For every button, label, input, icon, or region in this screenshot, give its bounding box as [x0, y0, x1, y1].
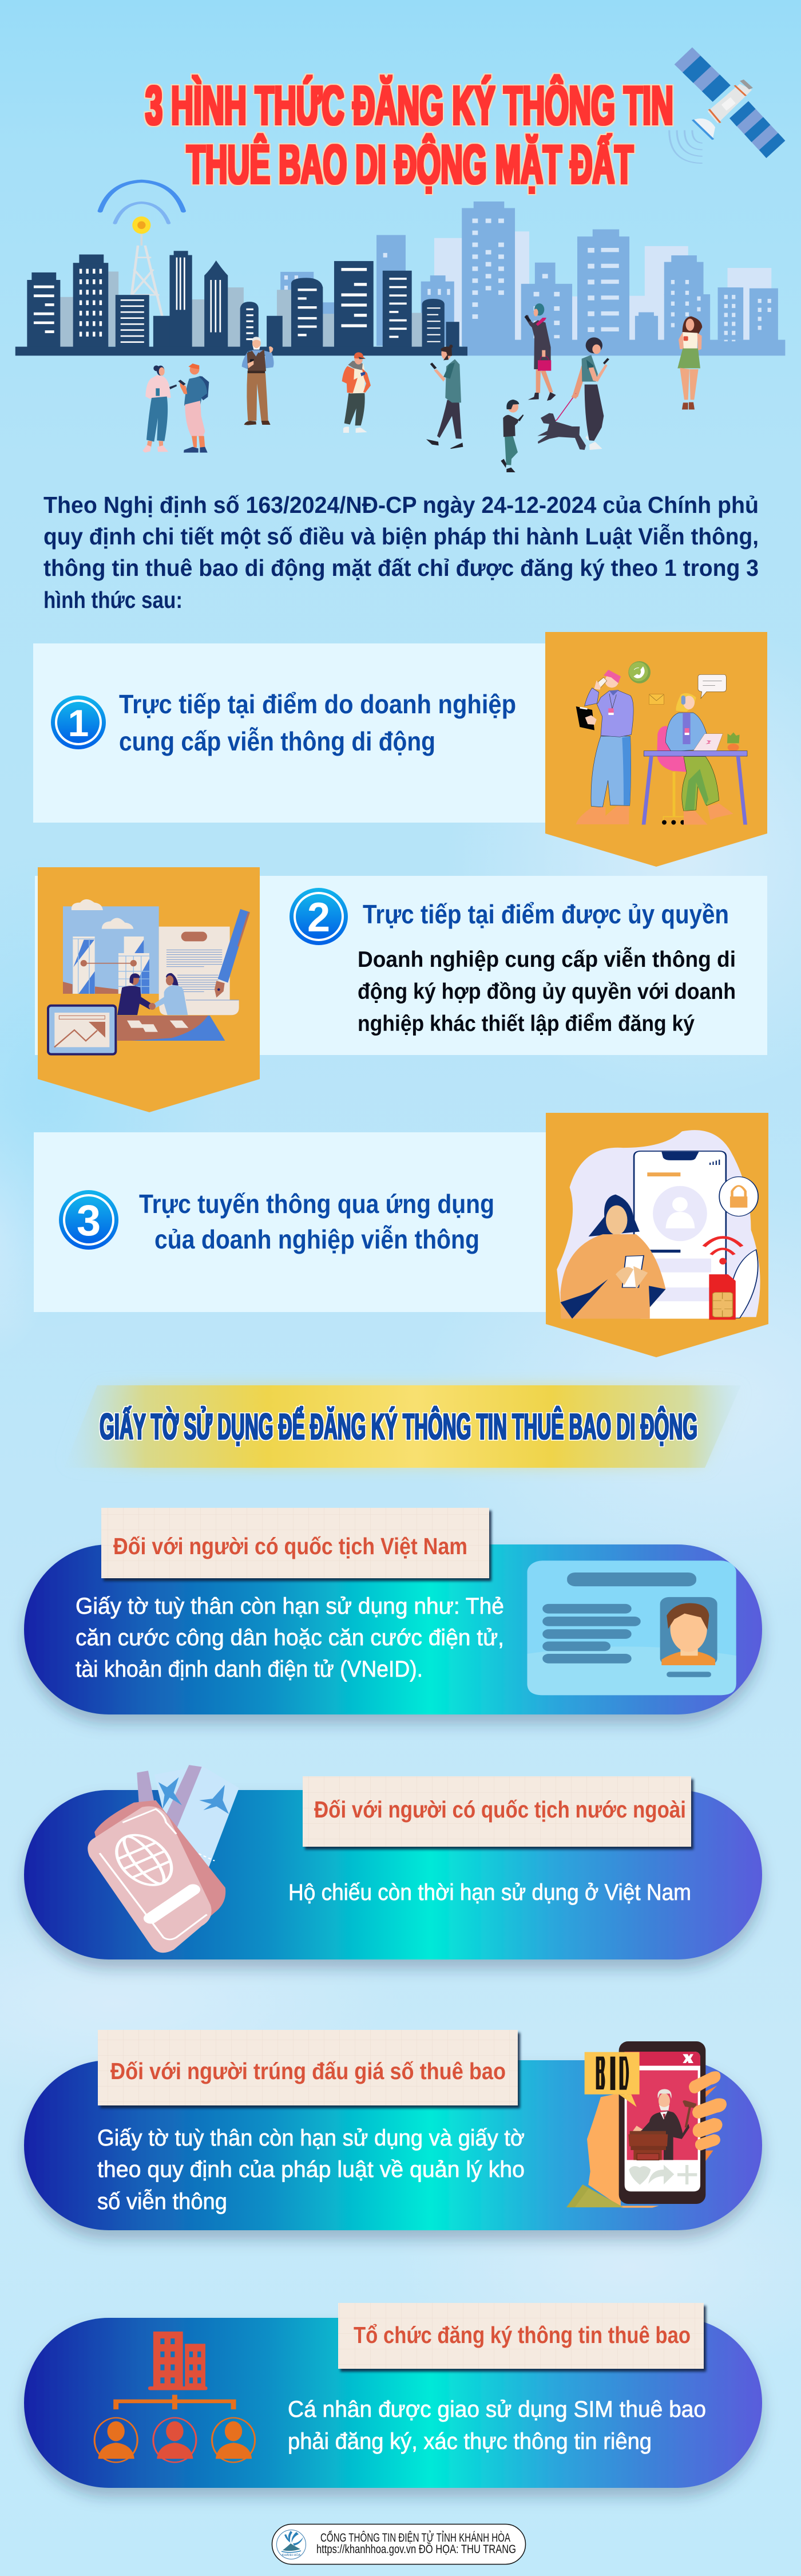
body text [288, 2397, 706, 2454]
panel: Vietnamese nationals [24, 1508, 762, 1714]
intro paragraph: hình thức sau: [43, 587, 183, 613]
tag: foreign nationals [303, 1776, 691, 1847]
panel: method 2 [35, 867, 767, 1112]
method 2 body [358, 947, 736, 1036]
method 2 body: động ký hợp đồng ủy quyền với doanh [358, 979, 736, 1004]
tag: organisations [338, 2303, 704, 2369]
people: walking man with beard [426, 345, 463, 449]
footer credit: https://khanhhoa.gov.vn ĐỒ HỌA: THU TRANG [316, 2542, 516, 2556]
people: two friends with phones [142, 364, 209, 453]
number badge 2 [290, 888, 348, 945]
skyline: dark blue city [15, 251, 467, 355]
body text: tài khoản định danh điện tử (VNeID). [76, 1657, 423, 1682]
icon: organisation chart [94, 2332, 255, 2462]
illustration: call-centre staff [576, 661, 747, 825]
body text [97, 2125, 525, 2214]
method 3 text [139, 1189, 494, 1254]
icon: wifi signal tower [100, 181, 184, 317]
tag: Vietnamese nationals [101, 1508, 489, 1578]
body text: Cá nhân được giao sử dụng SIM thuê bao [288, 2397, 706, 2422]
icon: passport and tickets [88, 1765, 239, 1953]
icon: Khanh Hoa logo [277, 2530, 306, 2559]
method 3 text: Trực tuyến thông qua ứng dụng [139, 1189, 494, 1219]
banner 1 [545, 632, 767, 867]
icon: Khanh Hoa logo: KHÁNH HÒA [282, 2553, 301, 2557]
panel: number auction winners [24, 2030, 762, 2230]
intro paragraph: Theo Nghị định số 163/2024/NĐ-CP ngày 24-12-2024 của Chính phủ [43, 492, 759, 518]
number badge 3 [59, 1190, 118, 1250]
body text: theo quy định của pháp luật về quản lý kho [97, 2157, 525, 2182]
body text: Giấy tờ tuỳ thân còn hạn sử dụng và giấy tờ [97, 2125, 525, 2151]
intro paragraph [43, 492, 759, 613]
body text: Giấy tờ tuỳ thân còn hạn sử dụng như: Thẻ [76, 1594, 504, 1619]
icon: satellite [669, 48, 785, 163]
method 1 text: Trực tiếp tại điểm do doanh nghiệp [119, 689, 516, 719]
panel: method 3 [34, 1113, 768, 1357]
number badge 1: 1 [68, 702, 89, 744]
skyline: light blue city [280, 202, 785, 355]
number badge 3: 3 [77, 1196, 101, 1245]
tag: foreign nationals: Đối với người có quốc tịch nước ngoài [314, 1796, 686, 1823]
method 2 body: nghiệp khác thiết lập điểm đăng ký [358, 1012, 695, 1036]
footer credit: CỔNG THÔNG TIN ĐIỆN TỬ TỈNH KHÁNH HÒA [320, 2531, 510, 2545]
body text: căn cước công dân hoặc căn cước điện tử, [76, 1625, 504, 1650]
people: woman in green skirt [677, 317, 702, 409]
body text: số viễn thông [97, 2188, 227, 2214]
tag: organisations: Tổ chức đăng ký thông tin thuê bao [354, 2322, 691, 2348]
illustration: signing authorisation contract [48, 899, 250, 1054]
people: man in orange jacket [342, 352, 371, 433]
section heading band [64, 1385, 741, 1468]
people: woman with handbag [525, 303, 556, 401]
intro paragraph: quy định chi tiết một số điều và biện pháp thi hành Luật Viễn thông, [43, 523, 759, 550]
people: woman walking dog [537, 337, 609, 450]
intro paragraph: thông tin thuê bao di động mặt đất chỉ được đăng ký theo 1 trong 3 [43, 555, 759, 581]
method 3 text: của doanh nghiệp viễn thông [154, 1224, 479, 1254]
panel: organisations [24, 2303, 762, 2488]
body text: Hộ chiếu còn thời hạn sử dụng ở Việt Nam [288, 1880, 691, 1905]
method 2 heading: Trực tiếp tại điểm được ủy quyền [363, 899, 729, 929]
number badge 1 [51, 696, 106, 749]
panel: method 1 [33, 632, 767, 867]
people: boy with phone [501, 400, 524, 472]
footer credit [272, 2524, 525, 2565]
title [145, 74, 673, 195]
body text [76, 1594, 504, 1682]
icon: hand holding auction phone [566, 2041, 727, 2208]
panel: foreign nationals [24, 1765, 762, 1959]
banner 3 [546, 1113, 768, 1357]
banner 2 [38, 867, 260, 1112]
tag: auction winners: Đối với người trúng đấu giá số thuê bao [110, 2058, 506, 2084]
illustration: online registration on phone [557, 1130, 760, 1319]
icon: ID card [527, 1560, 736, 1695]
method 1 text [119, 689, 516, 756]
tag: auction winners [98, 2030, 518, 2105]
method 1 text: cung cấp viễn thông di động [119, 726, 435, 756]
people: old man with phone [242, 337, 274, 425]
tag: Vietnamese nationals: Đối với người có quốc tịch Việt Nam [113, 1533, 467, 1559]
body text: phải đăng ký, xác thực thông tin riêng [288, 2429, 652, 2454]
number badge 2: 2 [307, 895, 330, 941]
method 2 body: Doanh nghiệp cung cấp viễn thông di [358, 947, 736, 972]
